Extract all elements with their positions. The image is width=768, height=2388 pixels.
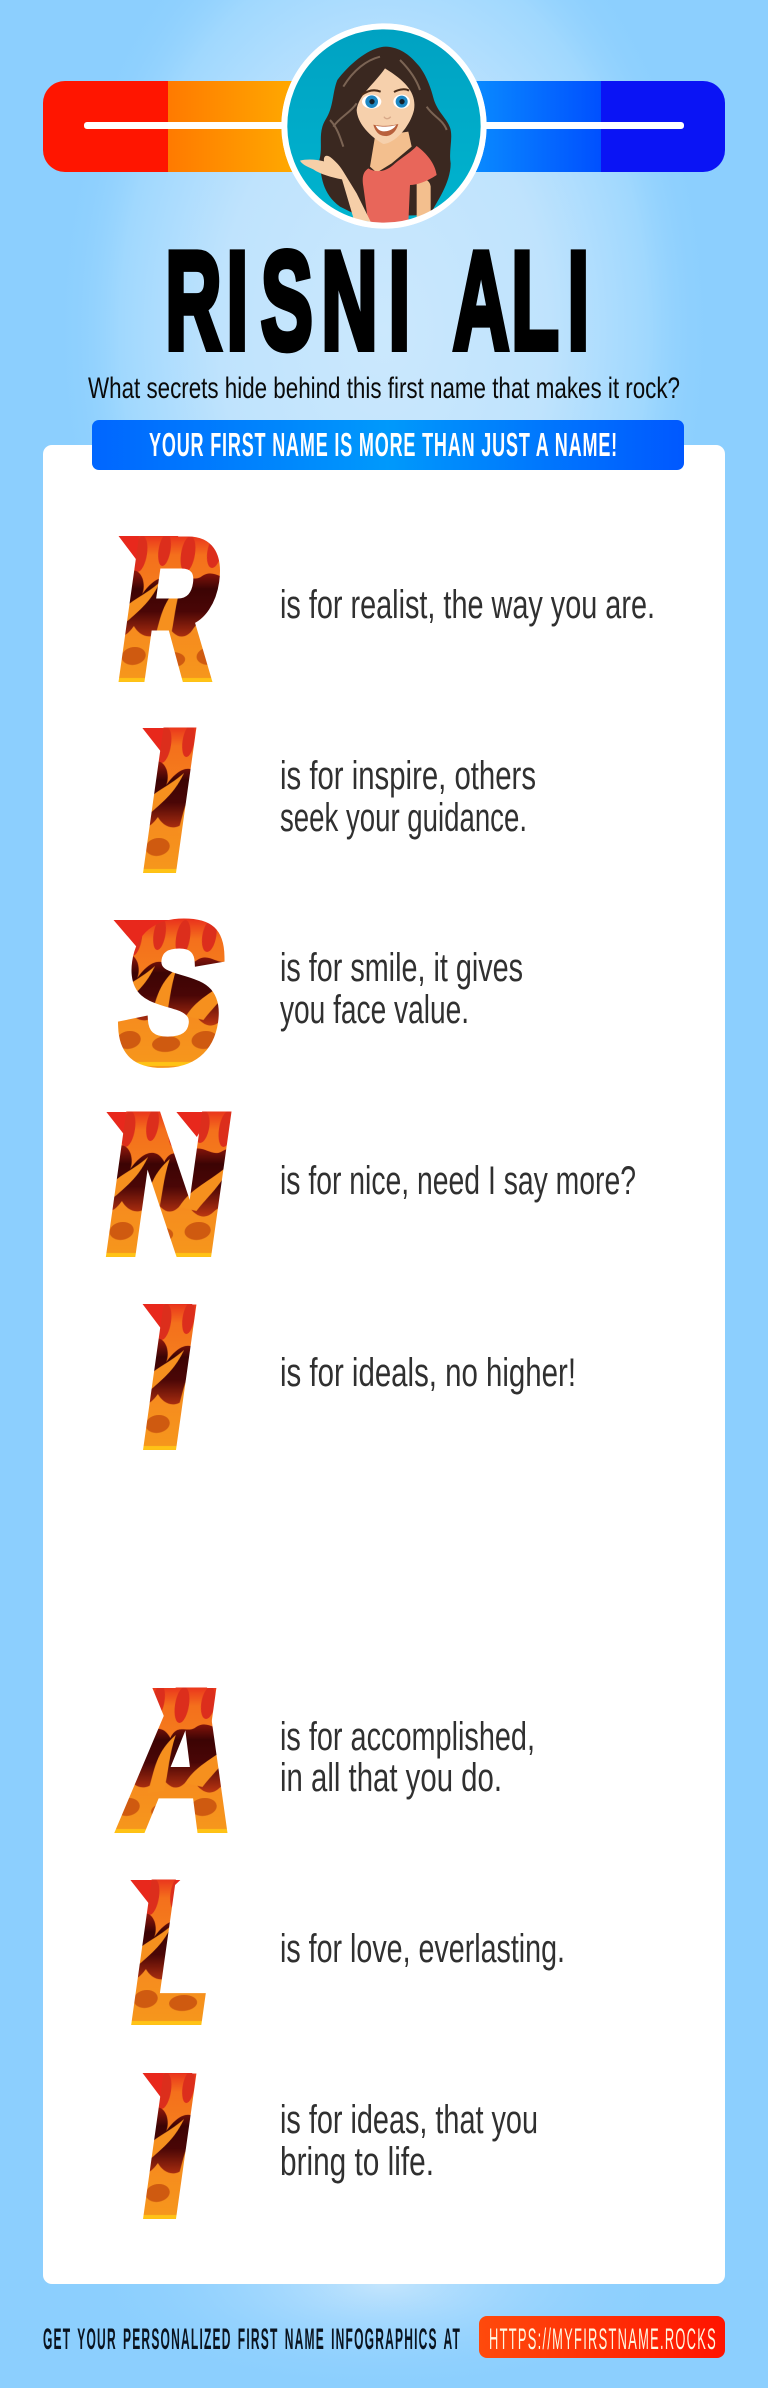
flame letter S: S — [107, 883, 240, 1103]
flame letter L — [105, 1842, 228, 2062]
footer URL button — [479, 2316, 725, 2358]
flame letter I: I — [131, 2036, 209, 2256]
letter I row — [117, 1267, 576, 1487]
flame letter I: I — [131, 1267, 209, 1487]
text: I meaning: is for ideas, that you — [280, 2098, 538, 2142]
banner — [92, 420, 684, 470]
flame letter A: A — [111, 1650, 252, 1870]
letter R row — [93, 499, 655, 719]
letter I row — [117, 690, 536, 910]
text: A meaning: is for accomplished, — [280, 1715, 535, 1759]
flame letter I: I — [131, 690, 209, 910]
header bar: red to orange, blue — [43, 81, 725, 172]
text: I meaning: is for ideals, no higher! — [280, 1351, 576, 1395]
flame letter L: L — [121, 1842, 228, 2062]
flame letter R — [93, 499, 235, 719]
avatar portrait — [282, 24, 486, 228]
letter I row — [117, 2036, 538, 2256]
text: I meaning: seek your guidance. — [280, 796, 527, 840]
text: I meaning: bring to life. — [280, 2140, 434, 2184]
letter S row — [88, 883, 523, 1103]
letter N row — [81, 1074, 636, 1294]
text: N meaning: is for nice, need I say more? — [280, 1159, 636, 1203]
text: S meaning: is for smile, it gives — [280, 946, 523, 990]
white content panel — [43, 445, 725, 2284]
text: A meaning: in all that you do. — [280, 1756, 502, 1800]
letter L row — [105, 1842, 565, 2062]
flame letter N: N — [94, 1074, 244, 1294]
title: RISNI ALI — [165, 223, 589, 378]
flame letter R: R — [108, 499, 235, 719]
text: S meaning: you face value. — [280, 988, 469, 1032]
text: L meaning: is for love, everlasting. — [280, 1927, 565, 1971]
text: I meaning: is for inspire, others — [280, 754, 536, 798]
letter A row — [111, 1650, 535, 1870]
